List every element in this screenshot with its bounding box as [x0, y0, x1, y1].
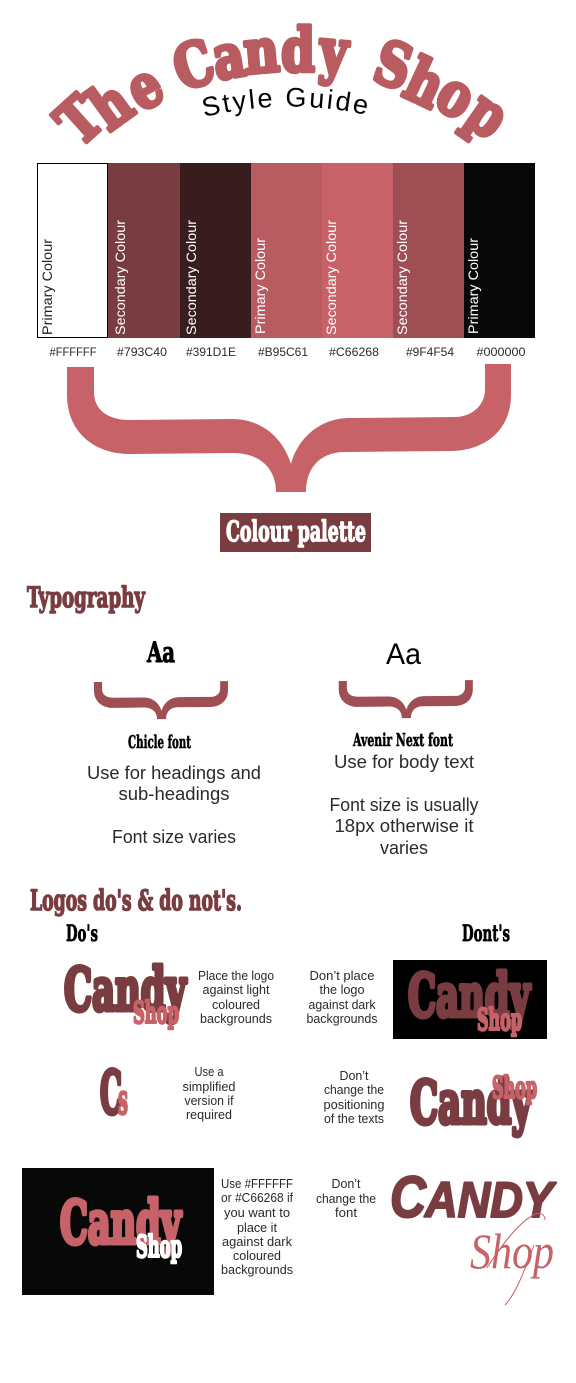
logo: wrong font: C	[390, 1165, 427, 1230]
hex labels: #793C40	[117, 347, 167, 359]
caption: font: font	[335, 1206, 358, 1220]
hex labels: #391D1E	[186, 347, 236, 359]
caption: positioning: positioning	[324, 1098, 385, 1112]
caption: not on dark: backgrounds	[306, 1012, 378, 1026]
hex labels: #9F4F54	[406, 347, 455, 359]
caption: positioning: of the texts	[324, 1112, 384, 1126]
caption: simplified version: version if	[184, 1094, 234, 1108]
label: Avenir Next font: Avenir Next font	[352, 730, 453, 751]
title: The Candy Shop: d	[281, 15, 315, 85]
caption: positioning	[324, 1069, 385, 1126]
panel: colour swatches: Primary Colour	[465, 238, 481, 334]
caption: place logo on light: against light	[202, 983, 270, 997]
caption: place logo on light: backgrounds	[200, 1012, 272, 1026]
caption: dark background colours: Use #FFFFFF	[221, 1177, 293, 1191]
panel: colour swatches: Secondary Colour	[112, 220, 128, 335]
caption: font: change the	[316, 1192, 376, 1206]
logo: simplified Cs: C	[100, 1058, 122, 1127]
panel: colour swatches: Secondary Colour	[394, 220, 410, 335]
panel: colour swatches: Secondary Colour	[183, 220, 199, 335]
hex labels: #FFFFFF	[50, 347, 96, 359]
hex labels: #000000	[476, 347, 526, 359]
body text: Chicle usage: Use for headings and	[87, 763, 261, 783]
logo: wrong dark background: Shop	[477, 1003, 522, 1038]
caption: not on dark: against dark	[308, 998, 376, 1012]
caption: dark background colours: backgrounds	[221, 1263, 293, 1277]
caption: simplified version: simplified	[182, 1080, 236, 1094]
logo: dark background correct	[22, 1168, 214, 1295]
heading: Logos do's & do not's: Logos do's & do not's.	[30, 884, 242, 917]
title: The Candy Shop: S	[366, 26, 421, 104]
caption: dark background colours: place it	[237, 1221, 278, 1235]
label: Colour palette	[220, 513, 371, 552]
panel: colour swatches: Secondary Colour	[323, 220, 339, 335]
logo: light background: Candy	[64, 955, 187, 1024]
heading: Typography: Typography	[27, 581, 145, 614]
icon: large curly brace	[67, 364, 511, 492]
caption: place logo on light: coloured	[212, 998, 260, 1012]
body text: Avenir usage	[330, 752, 478, 858]
title: The Candy Shop: h	[394, 44, 456, 122]
caption: simplified version: required	[186, 1108, 232, 1122]
logo: wrong font: ANDY	[423, 1172, 557, 1228]
body text: Avenir usage: 18px otherwise it	[334, 816, 474, 836]
panel: Chicle font	[87, 636, 261, 847]
caption: dark background colours: you want to	[224, 1206, 290, 1220]
logo: dark background correct: Shop	[136, 1230, 182, 1265]
body text: Avenir usage: Use for body text	[334, 752, 474, 772]
title: The Candy Shop: o	[425, 56, 488, 133]
logo: light background: Shop	[133, 996, 179, 1031]
logo: wrong font	[390, 1165, 557, 1305]
title: The Candy Shop: e	[114, 48, 174, 125]
title: The Candy Shop: C	[164, 26, 223, 105]
caption: positioning: Don’t	[340, 1069, 369, 1083]
subtitle: Style Guide: Style Guide	[203, 88, 367, 116]
logo: simplified Cs	[100, 1058, 128, 1127]
hex labels: #C66268	[329, 347, 379, 359]
caption: simplified version: Use a	[194, 1065, 224, 1079]
caption: not on dark: Don’t place	[310, 969, 375, 983]
logo: dark background correct: Candy	[60, 1188, 182, 1257]
panel: colour swatches: Primary Colour	[252, 238, 268, 334]
caption: place logo on light: Place the logo	[198, 969, 274, 983]
caption: not on dark: the logo	[320, 983, 365, 997]
caption: font	[316, 1177, 376, 1220]
specimen: Avenir Aa: Aa	[386, 638, 421, 671]
title: The Candy Shop: p	[454, 75, 522, 152]
caption: dark background colours: or #C66268 if	[221, 1191, 293, 1205]
hex labels: #B95C61	[258, 347, 308, 359]
title: The Candy Shop: h	[76, 66, 146, 144]
body text: Avenir usage: Font size is usually	[330, 795, 478, 815]
label: Chicle font: Chicle font	[128, 732, 191, 753]
caption: not on dark	[306, 969, 378, 1026]
caption: dark background colours: coloured	[233, 1249, 281, 1263]
title: The Candy Shop: a	[207, 19, 250, 94]
caption: dark background colours	[221, 1177, 293, 1277]
logo: wrong dark background	[393, 960, 547, 1039]
specimen: Chicle Aa: Aa	[146, 636, 175, 669]
panel: colour swatches	[38, 163, 535, 338]
title: The Candy Shop: n	[241, 14, 282, 88]
caption: font: Don’t	[332, 1177, 361, 1191]
logo: light background	[64, 955, 187, 1031]
text: s	[118, 1075, 128, 1124]
body text: Chicle usage: Font size varies	[112, 827, 236, 847]
body text: Chicle usage	[87, 763, 261, 847]
logo: wrong positioning: Shop	[492, 1071, 537, 1106]
caption: positioning: change the	[324, 1083, 384, 1097]
title: The Candy Shop	[42, 14, 522, 159]
caption: dark background colours: against dark	[222, 1235, 293, 1249]
body text: Avenir usage: varies	[380, 838, 428, 858]
panel: colour swatches: Primary Colour	[39, 239, 55, 335]
body text: Chicle usage: sub-headings	[118, 784, 230, 804]
title: The Candy Shop: T	[42, 82, 116, 159]
icon: small brace left	[94, 681, 228, 719]
panel: Avenir Next font	[330, 638, 478, 858]
logo: wrong font: Shop	[470, 1223, 554, 1279]
label: Colour palette: Colour palette	[226, 515, 366, 548]
caption: place logo on light	[198, 969, 274, 1026]
caption: simplified version	[182, 1065, 236, 1122]
sub-heading: Do's: Do's	[66, 921, 98, 947]
title: The Candy Shop: y	[316, 15, 352, 88]
sub-heading: Dont's: Dont's	[462, 921, 510, 947]
icon: small brace right	[339, 680, 473, 718]
hex labels	[50, 347, 526, 359]
